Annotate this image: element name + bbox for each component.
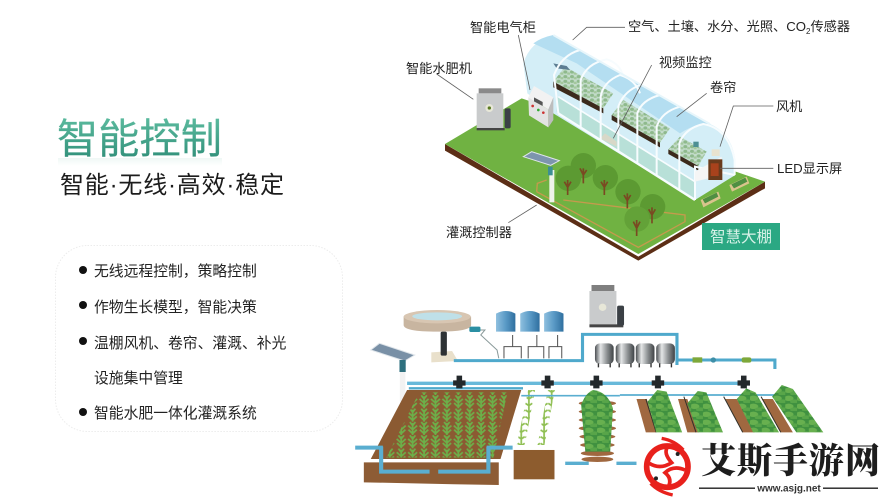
planter boxes bbox=[701, 192, 721, 207]
irrigation controller bbox=[523, 152, 559, 202]
label: video monitoring: 视频监控 bbox=[659, 55, 712, 70]
irrigation system diagram bbox=[355, 285, 823, 485]
label: fertigation machine: 智能水肥机 bbox=[406, 61, 472, 76]
leader lines bbox=[437, 27, 773, 223]
greenhouse bbox=[523, 35, 749, 207]
site name: 艾斯手游网 bbox=[701, 434, 881, 484]
mixing vessels bbox=[595, 343, 675, 367]
field: single row crop bbox=[565, 390, 636, 463]
badge: smart greenhouse: 智慧大棚 bbox=[710, 228, 772, 246]
growing beds bbox=[553, 63, 707, 171]
subtitle: 智能·无线·高效·稳定 bbox=[60, 172, 284, 199]
smart greenhouse illustration bbox=[437, 27, 773, 261]
label: sensors: 传感器 bbox=[810, 18, 850, 34]
solar panel bbox=[371, 343, 415, 372]
smart fertigation machine bbox=[477, 88, 511, 130]
three water tanks bbox=[496, 311, 563, 358]
trees bbox=[556, 153, 665, 236]
bullet item 3: 设施集中管理 bbox=[94, 370, 183, 387]
valves bbox=[453, 376, 750, 388]
field: bed rows bbox=[620, 385, 823, 432]
arched ribs bbox=[553, 35, 735, 200]
panel: feature list bbox=[56, 246, 342, 432]
title reflection bbox=[58, 158, 222, 166]
label: irrigation controller: 灌溉控制器 bbox=[446, 225, 512, 240]
reservoir tank bbox=[404, 310, 499, 362]
label: sensors: 空气、土壤、水分、光照、CO bbox=[628, 19, 806, 34]
bullet item 2: 作物生长模型，智能决策 bbox=[94, 298, 257, 316]
supply pipes bbox=[403, 334, 775, 402]
smart electrical cabinet bbox=[528, 86, 553, 127]
bullet item 4: 智能水肥一体化灌溉系统 bbox=[94, 404, 257, 422]
fence bbox=[537, 180, 685, 247]
field: drip lines with soil cutaway bbox=[514, 390, 620, 479]
icon: red fish emblem bbox=[647, 438, 688, 495]
ground plot bbox=[445, 98, 765, 261]
label: fan: 风机 bbox=[776, 99, 802, 114]
label: led display: LED显示屏 bbox=[777, 161, 842, 176]
site url: www.asjg.net bbox=[756, 484, 821, 494]
bullet item 1: 无线远程控制，策略控制 bbox=[94, 263, 257, 280]
watermark logo bbox=[647, 434, 881, 495]
inline filters bbox=[693, 357, 751, 363]
field: furrow irrigated crop bbox=[355, 390, 521, 485]
bullet item 3 bbox=[79, 335, 287, 387]
bullet item 3: 温棚风机、卷帘、灌溉、补光 bbox=[94, 335, 287, 352]
badge: smart greenhouse bbox=[702, 223, 780, 250]
led display bbox=[693, 142, 722, 182]
label: smart electrical cabinet: 智能电气柜 bbox=[470, 20, 536, 35]
label: roller blind: 卷帘 bbox=[710, 80, 736, 95]
label: sensors: 2 bbox=[806, 27, 811, 36]
fertigation machine bbox=[589, 285, 624, 327]
title: 智能控制 bbox=[57, 116, 222, 162]
